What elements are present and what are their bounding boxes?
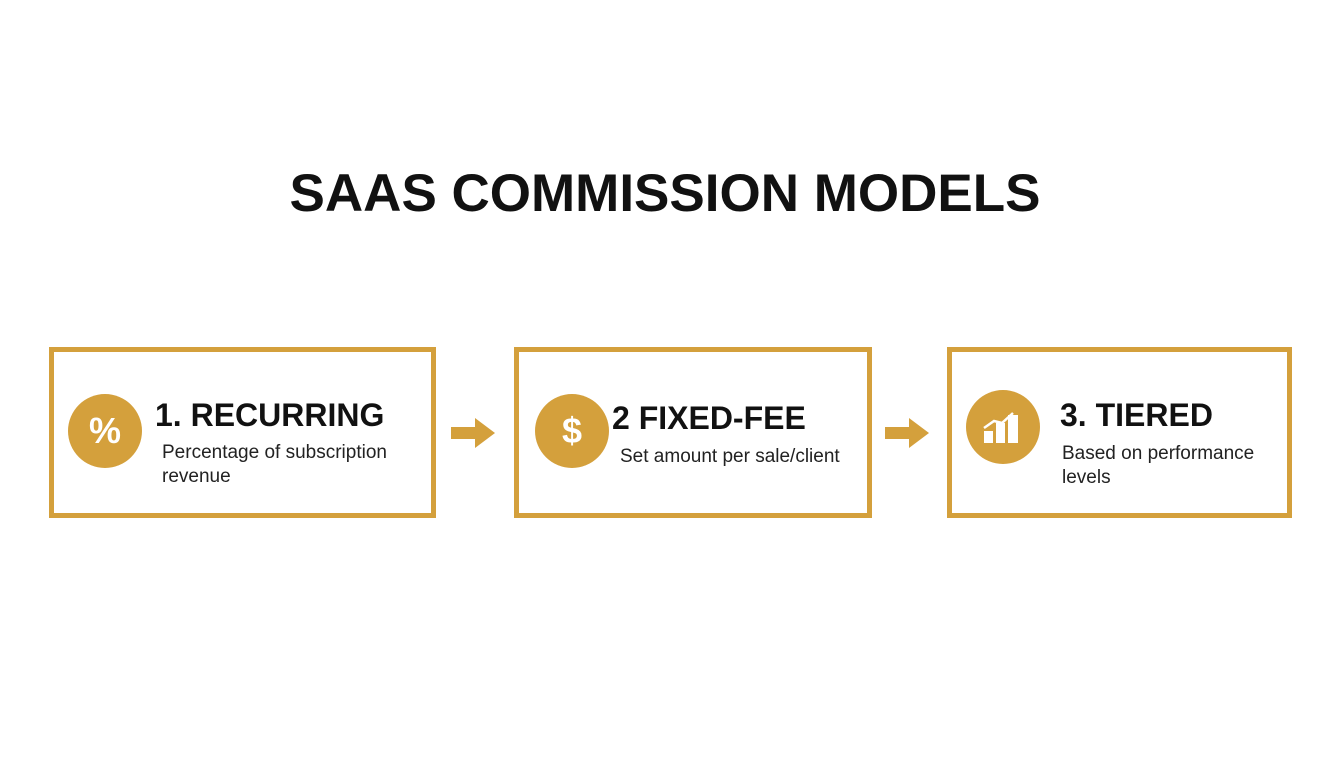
icon: percent: %	[89, 410, 121, 451]
heading: fixed-fee: 2 FIXED-FEE	[612, 400, 806, 436]
icon: percent	[68, 394, 142, 468]
heading: tiered: 3. TIERED	[1060, 397, 1213, 433]
panel: fixed-fee	[514, 347, 872, 518]
icon: chart	[966, 390, 1040, 464]
panel: tiered	[947, 347, 1292, 518]
description: fixed-fee: Set amount per sale/client	[620, 446, 840, 467]
icon: dollar: $	[562, 410, 582, 451]
panel: recurring	[49, 347, 436, 518]
description: recurring	[162, 442, 387, 487]
heading: recurring: 1. RECURRING	[155, 397, 384, 433]
icon: dollar	[535, 394, 609, 468]
description: tiered: Based on performance	[1062, 443, 1254, 464]
title: SAAS COMMISSION MODELS	[290, 164, 1040, 223]
arrow 1	[451, 418, 495, 448]
description: recurring: Percentage of subscription	[162, 442, 387, 463]
arrow 2	[885, 418, 929, 448]
description: tiered	[1062, 443, 1254, 488]
description: tiered: levels	[1062, 467, 1111, 488]
description: recurring: revenue	[162, 466, 231, 487]
